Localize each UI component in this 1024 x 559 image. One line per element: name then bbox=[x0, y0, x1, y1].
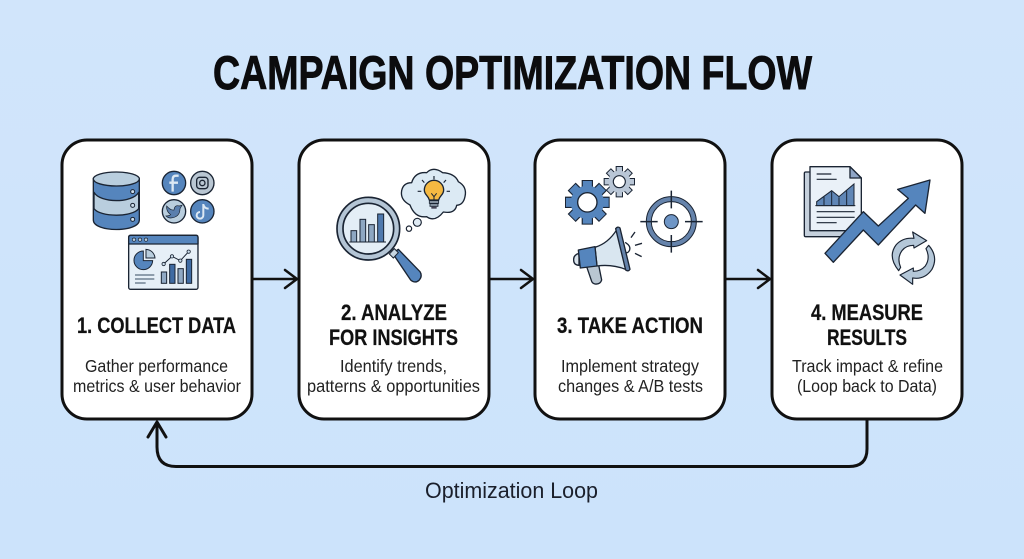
description: collect data: Gather performance bbox=[85, 356, 228, 376]
loop label: Optimization Loop bbox=[425, 478, 598, 503]
description: measure results: Track impact & refine bbox=[792, 356, 943, 376]
heading: analyze for insights: FOR INSIGHTS bbox=[329, 325, 458, 350]
description: analyze for insights: Identify trends, bbox=[340, 356, 447, 376]
description: collect data: metrics & user behavior bbox=[73, 376, 241, 396]
icon: report document bbox=[804, 167, 861, 237]
heading: measure results: RESULTS bbox=[827, 325, 907, 350]
description: collect data bbox=[73, 356, 241, 396]
description: measure results: (Loop back to Data) bbox=[797, 376, 937, 396]
arrow: step 1 to step 2 bbox=[252, 270, 297, 288]
description: take action bbox=[558, 356, 703, 396]
title: CAMPAIGN OPTIMIZATION FLOW bbox=[213, 46, 813, 99]
heading: take action: 3. TAKE ACTION bbox=[557, 313, 703, 338]
description: analyze for insights: patterns & opportunities bbox=[307, 376, 480, 396]
description: analyze for insights bbox=[307, 356, 480, 396]
icon: social media badges bbox=[162, 171, 214, 223]
icon: database bbox=[93, 172, 139, 229]
icon: refresh cycle bbox=[892, 232, 935, 284]
description: measure results bbox=[792, 356, 943, 396]
arrow: step 2 to step 3 bbox=[489, 270, 533, 288]
panel: analyze for insights bbox=[299, 140, 489, 419]
heading: collect data: 1. COLLECT DATA bbox=[77, 313, 236, 338]
description: take action: changes & A/B tests bbox=[558, 376, 703, 396]
description: take action: Implement strategy bbox=[561, 356, 699, 376]
panel: take action bbox=[535, 140, 725, 419]
panel: collect data bbox=[62, 140, 252, 419]
heading: measure results: 4. MEASURE bbox=[811, 300, 923, 325]
arrow: optimization loop bbox=[148, 420, 867, 466]
heading: analyze for insights: 2. ANALYZE bbox=[341, 300, 447, 325]
heading: analyze for insights bbox=[329, 300, 458, 350]
icon: megaphone bbox=[574, 227, 642, 284]
icon: target bbox=[640, 191, 703, 253]
icon: analytics dashboard bbox=[129, 235, 198, 289]
arrow: step 3 to step 4 bbox=[725, 270, 770, 288]
icon: thought cloud with light bulb bbox=[401, 169, 465, 231]
icon: rising arrow bbox=[825, 180, 930, 262]
icon: magnifying glass with chart bbox=[337, 197, 421, 282]
panel: measure results bbox=[772, 140, 962, 419]
icon: gears bbox=[565, 166, 635, 225]
heading: measure results bbox=[811, 300, 923, 350]
